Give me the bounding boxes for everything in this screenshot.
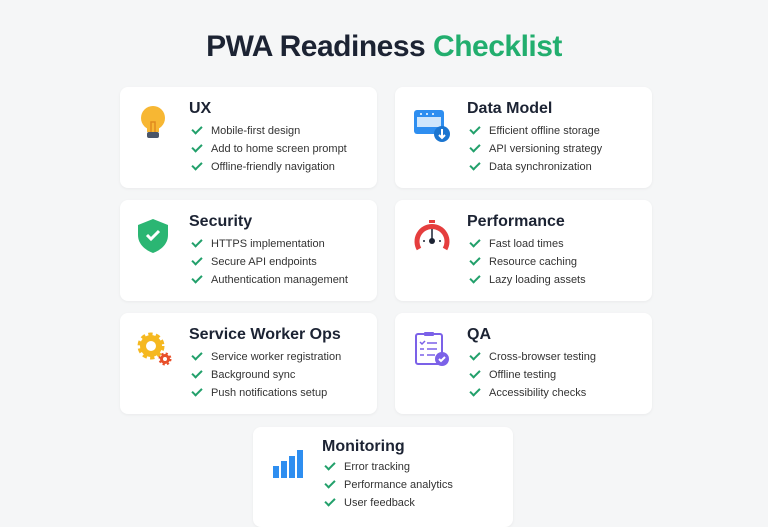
icon: gauge <box>414 220 450 250</box>
checklist: Background sync <box>211 369 295 381</box>
icon: light bulb <box>141 106 165 138</box>
checklist: Add to home screen prompt <box>211 143 347 155</box>
panel: UX <box>120 87 377 188</box>
checklist: Fast load times <box>489 238 564 250</box>
title: PWA Readiness Checklist <box>206 30 562 63</box>
checklist <box>191 351 341 399</box>
checklist: Offline testing <box>489 369 556 381</box>
icon: gears <box>138 332 172 366</box>
checklist: Performance analytics <box>344 479 453 491</box>
checklist <box>324 461 453 509</box>
checklist: HTTPS implementation <box>211 238 325 250</box>
heading: Service Worker Ops <box>189 326 341 343</box>
heading: UX <box>189 100 211 117</box>
heading: Performance <box>467 213 565 230</box>
checklist: Push notifications setup <box>211 387 327 399</box>
panel: Monitoring <box>253 427 513 527</box>
checklist <box>469 351 596 399</box>
heading: QA <box>467 326 491 343</box>
icon: bar chart <box>273 450 303 478</box>
checklist: Service worker registration <box>211 351 341 363</box>
checklist: Cross-browser testing <box>489 351 596 363</box>
heading: Security <box>189 213 252 230</box>
heading: Monitoring <box>322 438 405 455</box>
icon: clipboard <box>415 332 449 366</box>
panel: Data Model <box>395 87 652 188</box>
checklist: Efficient offline storage <box>489 125 600 137</box>
checklist <box>469 238 586 286</box>
checklist: Accessibility checks <box>489 387 586 399</box>
checklist: Data synchronization <box>489 161 592 173</box>
checklist: Secure API endpoints <box>211 256 317 268</box>
checklist: Error tracking <box>344 461 410 473</box>
checklist: User feedback <box>344 497 415 509</box>
checklist <box>191 125 347 173</box>
checklist: Mobile-first design <box>211 125 300 137</box>
panel: Service Worker Ops <box>120 313 377 414</box>
icon: shield <box>138 219 168 253</box>
panel: Security <box>120 200 377 301</box>
checklist: Authentication management <box>211 274 348 286</box>
panel: Performance <box>395 200 652 301</box>
heading: Data Model <box>467 100 552 117</box>
panel: QA <box>395 313 652 414</box>
checklist: Resource caching <box>489 256 577 268</box>
checklist: API versioning strategy <box>489 143 602 155</box>
checklist <box>469 125 602 173</box>
icon: database download <box>414 110 450 142</box>
checklist <box>191 238 348 286</box>
checklist: Lazy loading assets <box>489 274 586 286</box>
checklist: Offline-friendly navigation <box>211 161 335 173</box>
